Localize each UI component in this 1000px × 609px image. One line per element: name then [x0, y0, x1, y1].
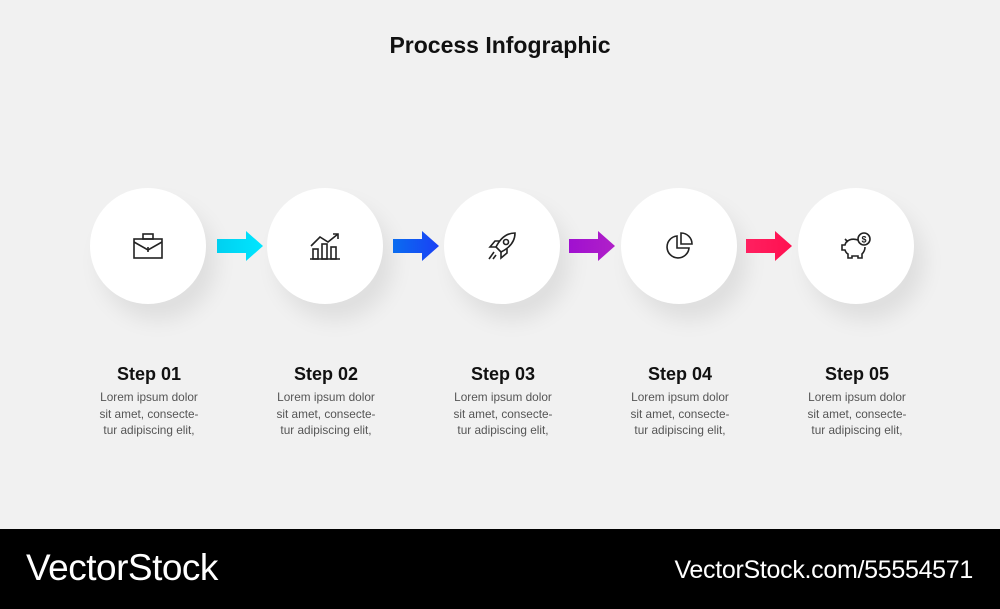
step 1 text: Step 01 — [117, 364, 181, 384]
footer url: VectorStock.com/55554571 — [674, 556, 973, 584]
step 2 text: Step 02 — [294, 364, 358, 384]
step 2 text: tur adipiscing elit, — [280, 423, 372, 437]
step 2 text: Lorem ipsum dolor — [277, 390, 375, 404]
footer bar — [0, 529, 1000, 609]
step 5 text: Lorem ipsum dolor — [808, 390, 906, 404]
footer logo: VectorStock — [26, 547, 218, 588]
arrow 3 — [569, 231, 615, 261]
step 3 text: tur adipiscing elit, — [457, 423, 549, 437]
step 3 text: Lorem ipsum dolor — [454, 390, 552, 404]
step 4 text: Step 04 — [648, 364, 712, 384]
step 1 text: tur adipiscing elit, — [103, 423, 195, 437]
arrow 2 — [393, 231, 439, 261]
arrow 4 — [746, 231, 792, 261]
step 5 text: tur adipiscing elit, — [811, 423, 903, 437]
step 4 text: Lorem ipsum dolor — [631, 390, 729, 404]
step 1 text: Lorem ipsum dolor — [100, 390, 198, 404]
step 1 text — [99, 364, 198, 437]
step 3 text: Step 03 — [471, 364, 535, 384]
circle 5: piggy bank — [798, 188, 914, 304]
title: Process Infographic — [389, 32, 611, 58]
step 3 text: sit amet, consecte- — [453, 406, 552, 420]
step 2 text — [276, 364, 376, 437]
circle 2: chart — [267, 188, 383, 304]
circle 1: briefcase — [90, 188, 206, 304]
step 5 text: Step 05 — [825, 364, 889, 384]
step 5 text — [807, 364, 906, 437]
step 4 text: sit amet, consecte- — [630, 406, 730, 420]
step 1 text: sit amet, consecte- — [99, 406, 198, 420]
step 3 text — [453, 364, 552, 437]
circle 5: piggy bank: $ — [861, 234, 867, 244]
step 4 text: tur adipiscing elit, — [634, 423, 726, 437]
circle 3: rocket — [444, 188, 560, 304]
step 4 text — [630, 364, 730, 437]
step 5 text: sit amet, consecte- — [807, 406, 906, 420]
arrow 1 — [217, 231, 263, 261]
circle 4: pie chart — [621, 188, 737, 304]
step 2 text: sit amet, consecte- — [276, 406, 376, 420]
